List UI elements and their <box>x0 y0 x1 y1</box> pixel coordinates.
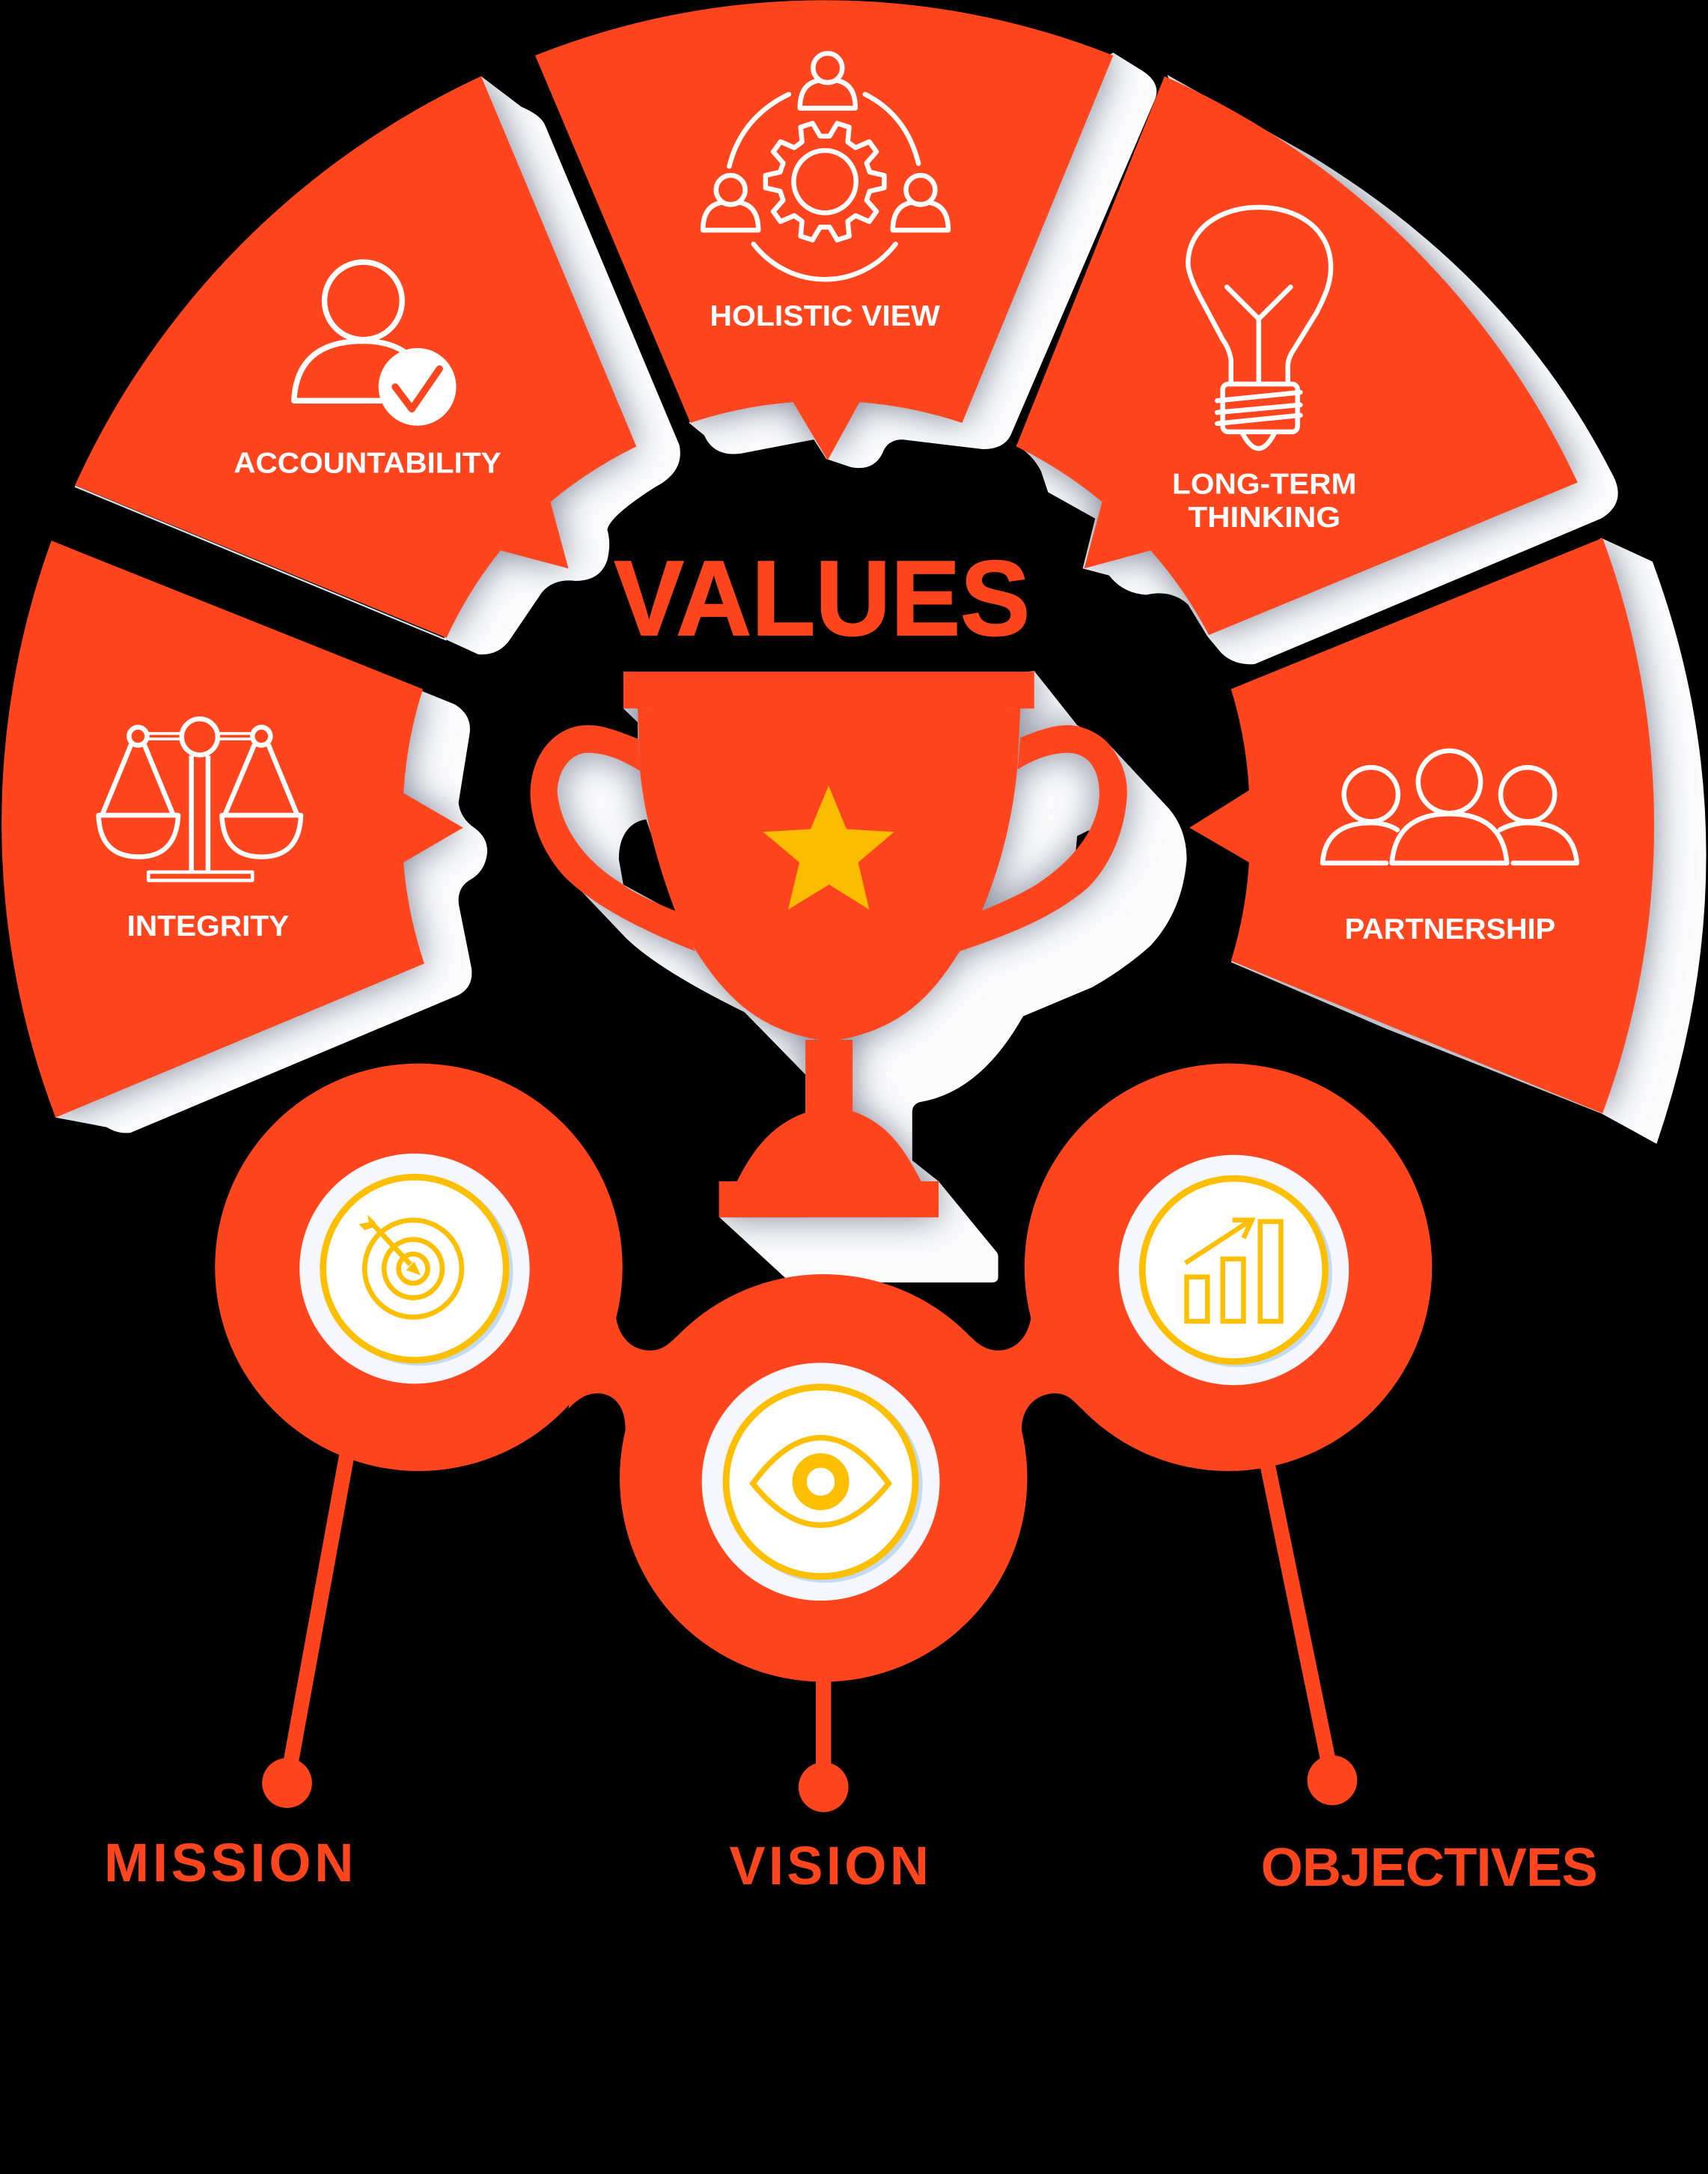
circle: objectives base <box>1025 1064 1432 1471</box>
icon: three people <box>1323 751 1577 863</box>
icon: vision eye <box>702 1362 939 1601</box>
trophy handles <box>531 725 1127 951</box>
label: long-term thinking: THINKING <box>1188 502 1341 534</box>
trophy <box>531 671 1186 1282</box>
icon: objectives chart <box>1119 1155 1349 1385</box>
icon: light bulb <box>1188 207 1331 448</box>
trophy rim <box>623 672 1034 708</box>
trophy star <box>763 785 894 910</box>
link: mission to vision <box>568 1315 680 1432</box>
segment: integrity <box>1 541 487 1133</box>
icon: mission target <box>299 1154 530 1383</box>
icon: person with check <box>294 262 456 426</box>
trophy shadow <box>531 671 1186 1282</box>
label: objectives: OBJECTIVES <box>1261 1838 1598 1898</box>
label: integrity: INTEGRITY <box>127 910 289 943</box>
trophy cup <box>638 708 1020 1041</box>
circle: vision base <box>620 1274 1028 1682</box>
segment: holistic view <box>535 0 1156 468</box>
link: objectives to vision <box>971 1315 1082 1432</box>
label: mission: MISSION <box>104 1833 353 1893</box>
circle: mission base <box>215 1064 623 1471</box>
label: long-term thinking <box>1172 468 1356 534</box>
trophy stem and base <box>719 1040 939 1217</box>
icon: scales <box>99 719 301 880</box>
label: long-term thinking: LONG-TERM <box>1172 468 1356 500</box>
segment: partnership <box>1189 538 1707 1144</box>
label: partnership: PARTNERSHIP <box>1345 913 1555 946</box>
connected circles <box>215 1064 1432 1812</box>
label: accountability: ACCOUNTABILITY <box>234 448 501 480</box>
icon: gear and people <box>703 53 948 279</box>
connector end dots <box>262 1756 1357 1812</box>
heading: values: VALUES <box>614 539 1030 658</box>
label: holistic view: HOLISTIC VIEW <box>710 300 940 332</box>
segment: long-term thinking <box>1016 75 1618 664</box>
segment: accountability <box>75 76 680 654</box>
label: vision: VISION <box>729 1836 929 1896</box>
connector lines <box>287 1456 1332 1788</box>
